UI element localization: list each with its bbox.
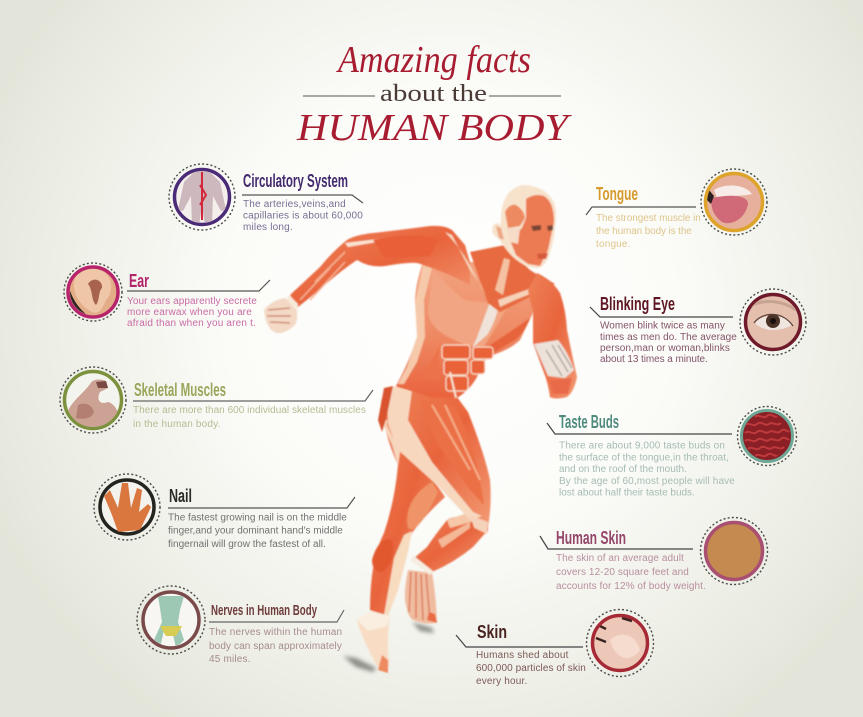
title bbox=[296, 39, 572, 149]
text block: person,man or woman,blinks bbox=[600, 343, 730, 354]
text block: The strongest muscle in bbox=[596, 213, 701, 224]
text block: The fastest growing nail is on the middle bbox=[168, 512, 347, 524]
title line: Amazing facts: Amazing facts bbox=[335, 39, 531, 81]
leader line bbox=[456, 635, 583, 647]
heading: Human Skin bbox=[556, 528, 626, 548]
icon: ear bbox=[64, 263, 122, 321]
leader line bbox=[540, 536, 693, 549]
icon: hand bbox=[94, 474, 160, 540]
text block: fingernail will grow the fastest of all. bbox=[168, 539, 326, 550]
neck and shoulder bbox=[470, 245, 555, 312]
heading: Ear bbox=[129, 271, 149, 291]
callout: circulatory system bbox=[169, 164, 363, 233]
text block: Your ears apparently secrete bbox=[127, 296, 257, 307]
title line: about the: about the bbox=[380, 81, 487, 107]
heading: Taste Buds bbox=[559, 412, 619, 432]
heading: Blinking Eye bbox=[600, 294, 675, 314]
text block: times as men do. The average bbox=[600, 332, 737, 343]
text block: tongue. bbox=[596, 239, 631, 250]
text block: The nerves within the human bbox=[209, 627, 342, 638]
text block: The arteries,veins,and bbox=[243, 199, 346, 210]
heading: Tongue bbox=[596, 184, 638, 204]
text block: There are about 9,000 taste buds on bbox=[559, 440, 725, 452]
text block: more earwax when you are bbox=[127, 307, 252, 318]
heading: Nail bbox=[169, 486, 192, 506]
callout: nail bbox=[94, 474, 355, 550]
leader line bbox=[209, 610, 344, 622]
human muscular figure bbox=[264, 185, 577, 673]
text block: body can span approximately bbox=[209, 641, 342, 652]
icon: tongue bbox=[701, 169, 767, 235]
callout: tongue bbox=[586, 169, 767, 250]
callout: skin bbox=[456, 610, 654, 687]
text block: and on the roof of the mouth. bbox=[559, 464, 687, 475]
heading: Circulatory System bbox=[243, 171, 348, 191]
text block: 600,000 particles of skin bbox=[476, 663, 586, 674]
leader line bbox=[168, 497, 355, 508]
head bbox=[492, 185, 556, 268]
leader line bbox=[586, 207, 696, 215]
text block: afraid than when you aren t. bbox=[127, 318, 256, 329]
callout: taste buds bbox=[547, 406, 796, 498]
text block: finger,and your dominant hand's middle bbox=[168, 526, 343, 536]
leader line bbox=[133, 390, 373, 401]
icon: nerves bbox=[137, 586, 205, 654]
text block: There are more than 600 individual skeletal muscles bbox=[133, 405, 366, 416]
callout: skeletal muscles bbox=[60, 367, 373, 433]
text block: lost about half their taste buds. bbox=[559, 488, 695, 498]
right arm with hand bbox=[528, 273, 577, 398]
icon: circulatory system bbox=[169, 164, 235, 230]
text block: The skin of an average adult bbox=[556, 553, 684, 564]
left arm with fist bbox=[264, 226, 492, 333]
icon: palm bbox=[586, 610, 654, 676]
icon: skin swatch bbox=[700, 518, 768, 584]
icon: flexed arm bbox=[60, 367, 126, 433]
rear leg bbox=[356, 390, 445, 673]
bent lower leg and foot bbox=[405, 511, 488, 624]
leader line bbox=[127, 280, 270, 291]
text block: every hour. bbox=[476, 676, 527, 687]
text block: capillaries is about 60,000 bbox=[243, 210, 363, 222]
text block: miles long. bbox=[243, 222, 293, 233]
text block: in the human body. bbox=[133, 419, 221, 430]
text block: about 13 times a minute. bbox=[600, 354, 708, 365]
leader line bbox=[242, 195, 363, 203]
callout: ear bbox=[64, 263, 270, 329]
leader line bbox=[547, 423, 732, 434]
callout: blinking eye bbox=[590, 289, 806, 365]
title line: HUMAN BODY: HUMAN BODY bbox=[296, 107, 572, 149]
callout: human skin bbox=[540, 518, 768, 592]
text block: covers 12-20 square feet and bbox=[556, 567, 689, 578]
text block: the human body is the bbox=[596, 226, 692, 237]
icon: eye bbox=[740, 289, 806, 355]
heading: Skeletal Muscles bbox=[134, 380, 226, 400]
torso bbox=[396, 255, 537, 398]
raised thigh bbox=[378, 385, 491, 534]
text block: Women blink twice as many bbox=[600, 320, 725, 332]
callout: nerves bbox=[137, 586, 344, 665]
text block: accounts for 12% of body weight. bbox=[556, 581, 706, 592]
text block: the surface of the tongue,in the throat, bbox=[559, 452, 729, 464]
heading: Skin bbox=[477, 622, 507, 642]
floor shadows bbox=[343, 622, 434, 672]
text block: 45 miles. bbox=[209, 654, 251, 665]
text block: By the age of 60,most people will have bbox=[559, 476, 735, 487]
icon: taste buds bbox=[738, 406, 796, 466]
leader line bbox=[590, 307, 733, 317]
text block: Humans shed about bbox=[476, 650, 569, 661]
heading: Nerves in Human Body bbox=[211, 602, 317, 619]
